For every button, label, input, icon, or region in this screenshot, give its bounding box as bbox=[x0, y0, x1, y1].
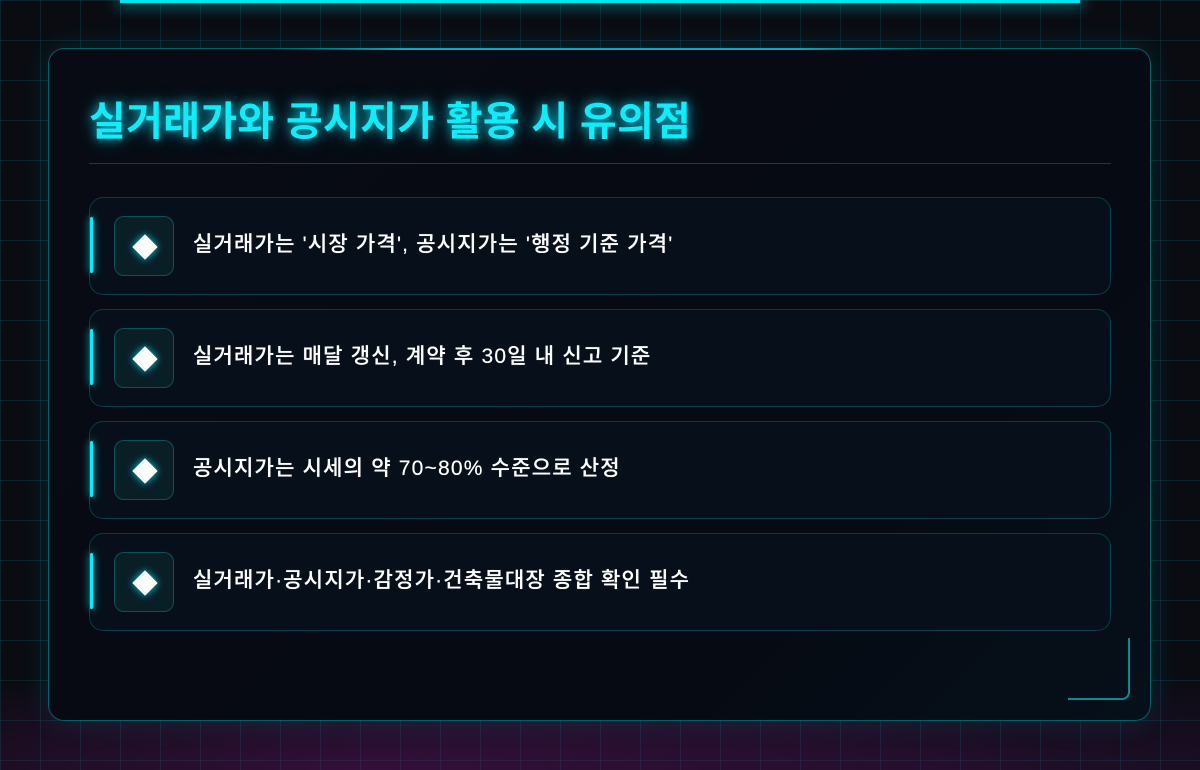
icon: diamond bbox=[114, 440, 174, 500]
icon: diamond bbox=[114, 328, 174, 388]
corner accent bbox=[1068, 638, 1130, 700]
icon: diamond bbox=[114, 552, 174, 612]
top glow bar bbox=[120, 0, 1080, 3]
icon: diamond bbox=[114, 216, 174, 276]
item 3 bbox=[89, 421, 1111, 519]
item 1 bbox=[89, 197, 1111, 295]
text 2: 실거래가는 매달 갱신, 계약 후 30일 내 신고 기준 bbox=[193, 345, 651, 368]
text 4: 실거래가·공시지가·감정가·건축물대장 종합 확인 필수 bbox=[193, 569, 690, 592]
item 4 bbox=[89, 533, 1111, 631]
text 3: 공시지가는 시세의 약 70~80% 수준으로 산정 bbox=[193, 457, 621, 480]
text 1: 실거래가는 '시장 가격', 공시지가는 '행정 기준 가격' bbox=[193, 233, 673, 256]
item 2 bbox=[89, 309, 1111, 407]
title: 실거래가와 공시지가 활용 시 유의점 bbox=[89, 100, 691, 144]
